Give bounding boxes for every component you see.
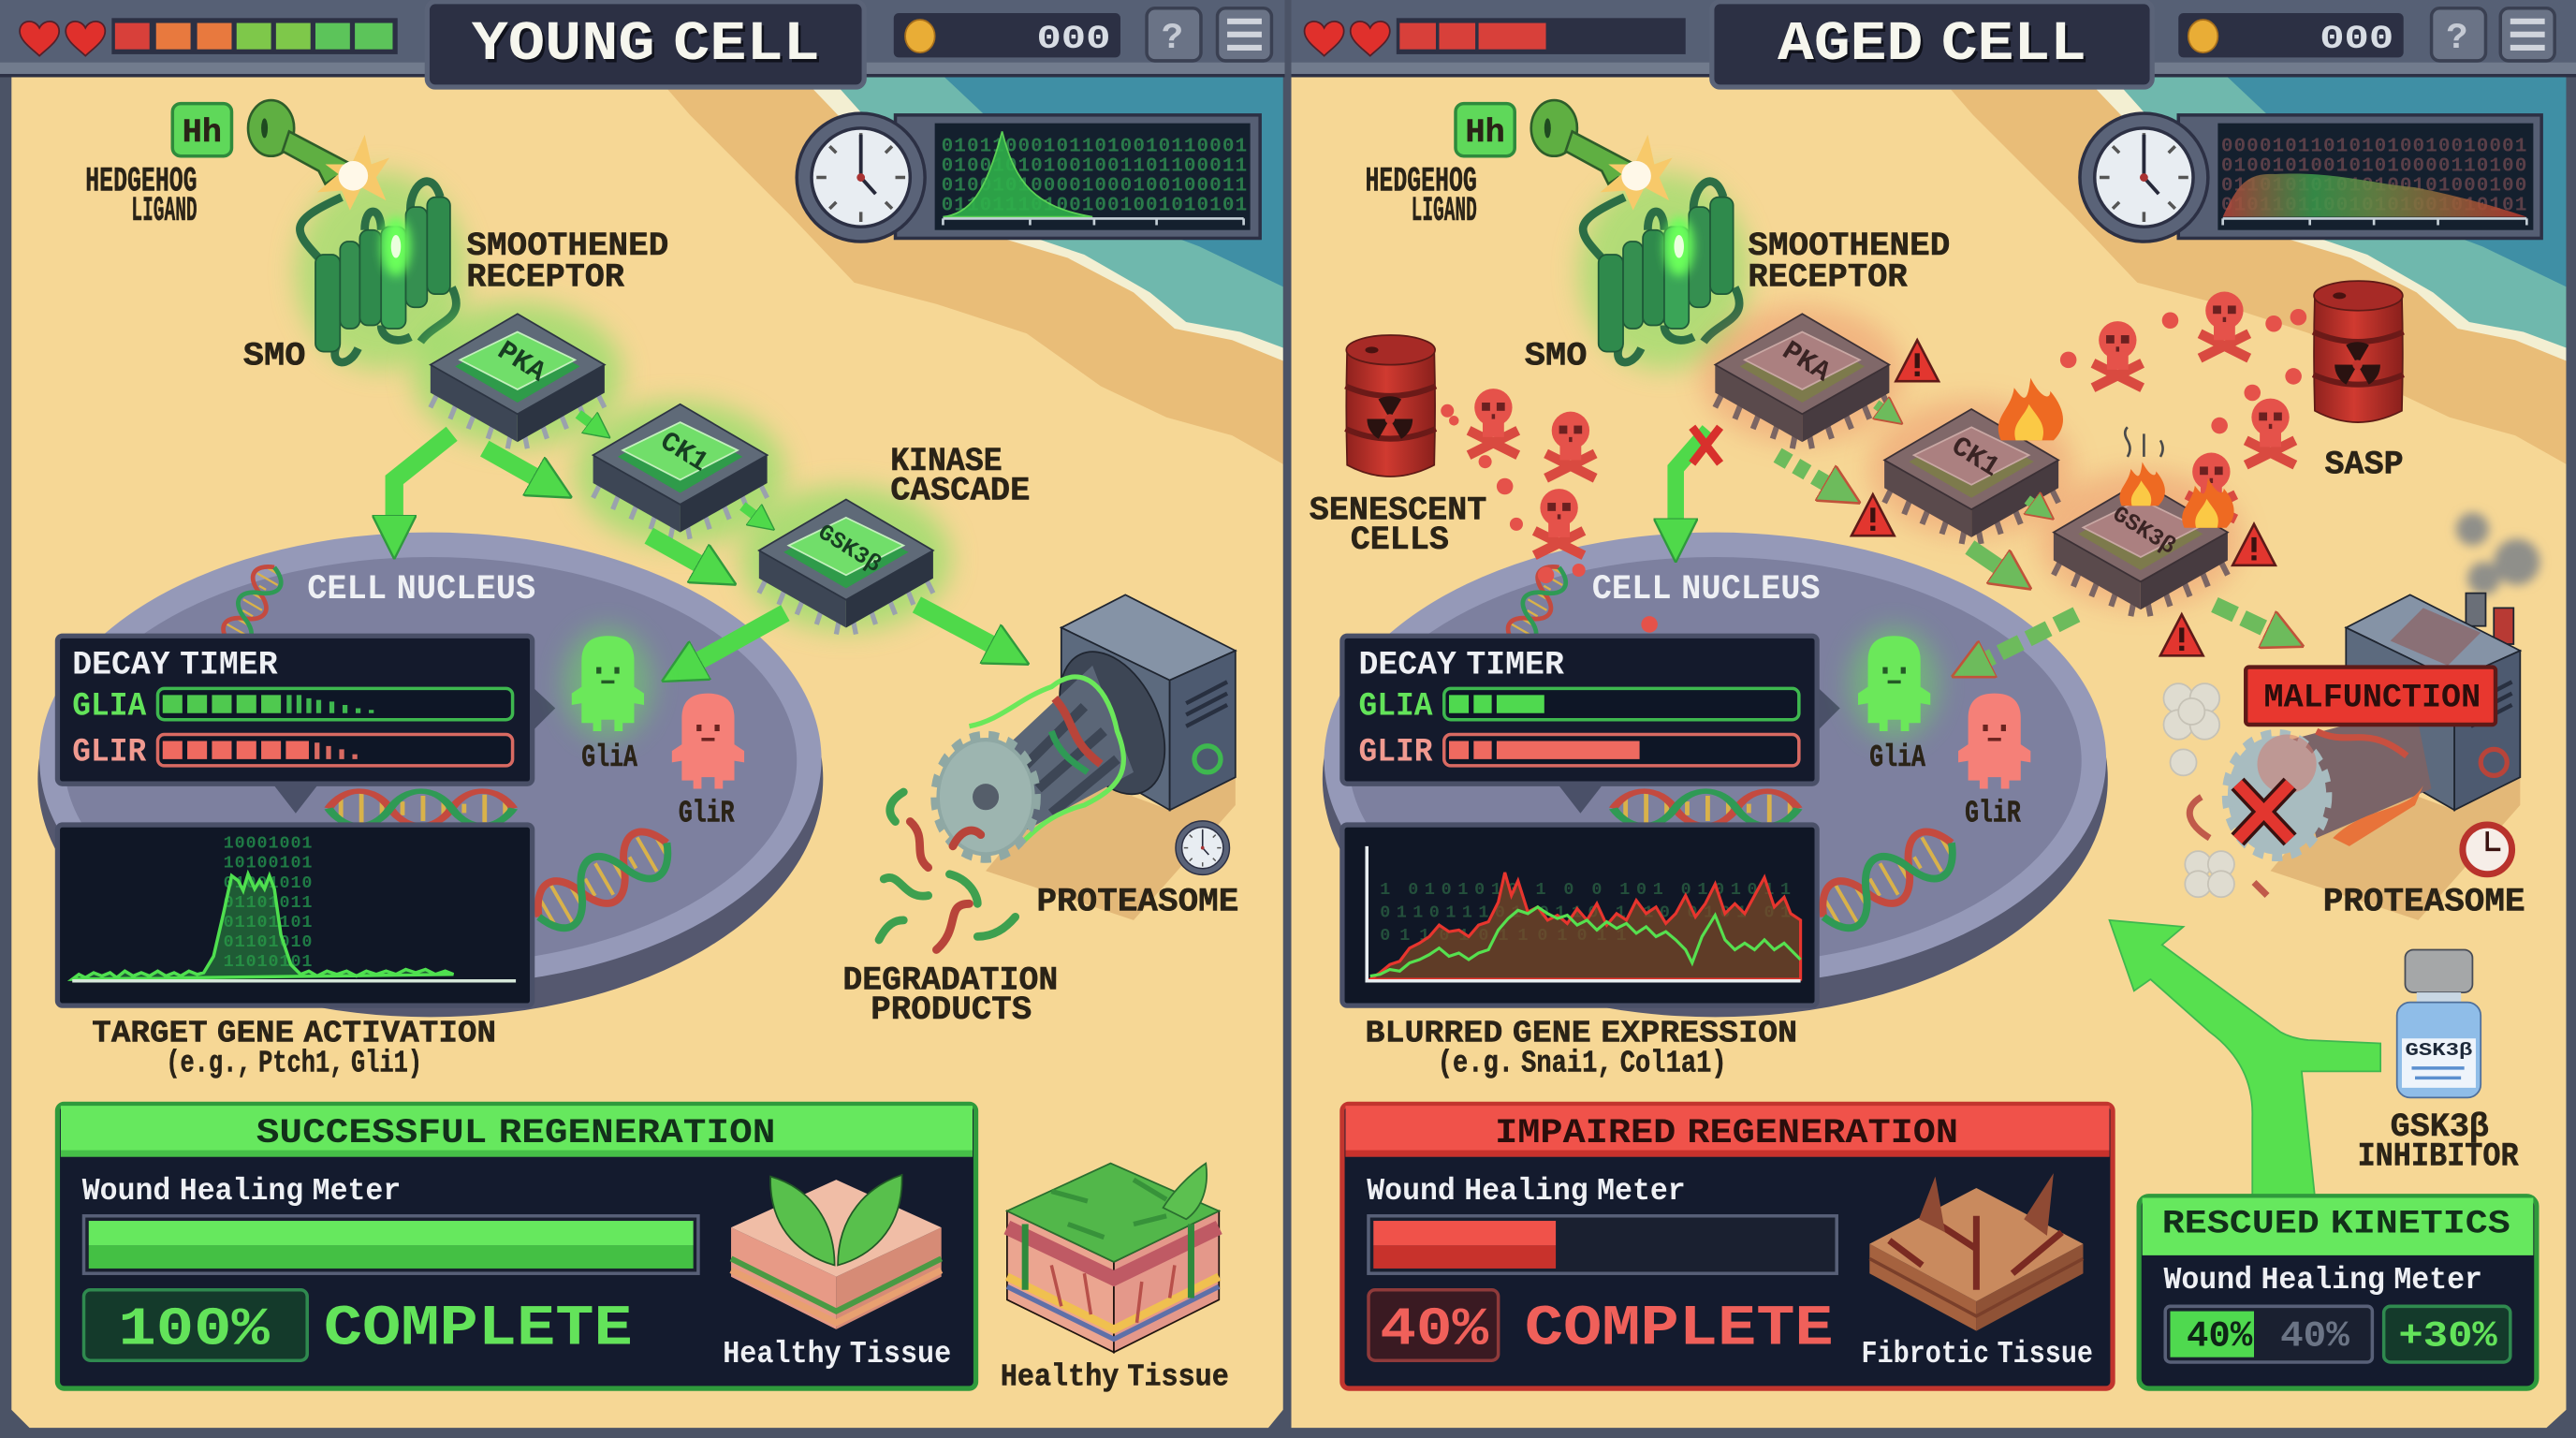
icon: fibrotic tissue: [1869, 1173, 2083, 1331]
nucleus disc: [37, 533, 823, 1017]
title box: AGED CELL: [1780, 16, 2089, 80]
icon: small clock: [1176, 821, 1229, 874]
title box: YOUNG CELL: [474, 16, 822, 80]
label: cell nucleus: CELL NUCLEUS: [1592, 570, 1821, 609]
glia characters: [1850, 627, 2030, 788]
kinase cascade chips: PKA: [491, 335, 551, 389]
label: fibrotic tissue: Fibrotic Tissue: [1862, 1337, 2093, 1372]
panel: blurred gene chart: 011011101 0110 1 10 0101 01: [1380, 902, 1791, 922]
label: glia: GliA: [581, 741, 637, 776]
meter bar: [84, 1216, 698, 1273]
broken proteasome: [2163, 513, 2539, 920]
energy bar: [111, 18, 398, 54]
hearts: [1305, 22, 1390, 56]
panel: clock and flat curve: [2080, 113, 2541, 242]
label: glia: GliA: [1869, 741, 1925, 776]
degradation fragments: [879, 792, 1016, 949]
label: gsk3b inhibitor: [2358, 1108, 2519, 1175]
kinase cascade chips: CK1: [654, 425, 714, 479]
value: 100%: 100%: [118, 1300, 270, 1361]
button: menu: [1218, 8, 1271, 61]
smoothened receptor with key: [172, 100, 466, 370]
panel: decay timer: [57, 636, 555, 814]
score: 000: [1036, 21, 1110, 58]
label: complete: COMPLETE: [324, 1298, 633, 1362]
dna strands: [217, 560, 680, 938]
label: degradation products: [842, 962, 1058, 1029]
label: senescent cells: CELLS: [1351, 521, 1449, 559]
heading: SUCCESSFUL REGENERATION: [256, 1114, 775, 1153]
value: +30%: +30%: [2398, 1315, 2498, 1357]
panel: clock and decay curve: [797, 113, 1260, 242]
panel: rescued kinetics: [2139, 1196, 2537, 1388]
smoothened receptor with key: [1456, 100, 1749, 370]
label: blurred gene expression: (e.g. Snai1, Col1a1): [1438, 1046, 1727, 1081]
panel: target gene chart: [57, 825, 533, 1005]
label: Hh: Hh: [183, 114, 222, 152]
button: help: ?: [1162, 18, 1183, 59]
label: smoothened receptor: SMOOTHENED: [1748, 227, 1950, 265]
proteasome machine: [936, 594, 1236, 920]
score: 000: [2320, 21, 2393, 58]
broken arrows: [1676, 404, 2271, 661]
panel: blurred gene chart: [1342, 825, 1817, 1005]
label: malfunction: [2246, 668, 2496, 725]
label: proteasome: PROTEASOME: [1036, 883, 1238, 920]
bar: glia: GLIA: [72, 687, 147, 725]
panel: impaired regeneration: [1342, 1104, 2113, 1388]
damaged kinase chips: GSK3β: [2107, 503, 2179, 561]
panel: clock and flat curve: 000010110101010010010001: [2221, 135, 2526, 157]
label: hedgehog ligand: HEDGEHOG: [1365, 163, 1477, 202]
energy bar: [1397, 18, 1686, 54]
button: help: [1147, 8, 1201, 61]
bar: glir: GLIR: [1358, 734, 1433, 771]
panel: target gene chart: 01101010: [224, 932, 312, 952]
label: Hh: Hh: [1466, 114, 1505, 152]
panel: clock and flat curve: 011010101010100101000100: [2221, 175, 2526, 198]
damaged kinase chips: CK1: [1946, 431, 2005, 484]
icon: healthy tissue block: [1007, 1164, 1219, 1352]
label: senescent cells: [1310, 492, 1486, 559]
panel: target gene chart: 10001001: [224, 834, 312, 854]
meter: 40% to 40%: 40%: [2187, 1315, 2253, 1357]
label: smoothened receptor: RECEPTOR: [466, 258, 625, 296]
label: kinase cascade: [890, 443, 1030, 510]
panel: blurred gene chart: 1 0101010 1 0 0 101 0101011: [1380, 880, 1791, 900]
meter: 40% to 40%: 40%: [2280, 1315, 2350, 1357]
icons: skulls: [1469, 292, 2295, 555]
damaged kinase chips: [1701, 305, 2243, 616]
bar: glir: GLIR: [72, 734, 147, 771]
icon: red clock: [2463, 825, 2512, 874]
panel: successful regeneration: [57, 1104, 976, 1388]
label: decay timer: DECAY TIMER: [72, 647, 279, 684]
label: healthy tissue: Healthy Tissue: [723, 1337, 951, 1372]
panel: clock and decay curve: 010010100001000100100011: [942, 175, 1247, 198]
panel: target gene chart: 11010101: [224, 952, 312, 972]
panel: clock and decay curve: 010010101001001101100011: [942, 155, 1247, 178]
button: menu: [2500, 8, 2554, 61]
arrow: rescue: [2110, 920, 2380, 1196]
button: help: ?: [2446, 18, 2468, 59]
score: [2178, 13, 2404, 58]
hearts: [20, 22, 105, 56]
label: glir: GliR: [679, 797, 735, 832]
panel: target gene chart: 01101101: [224, 913, 312, 932]
panel: clock and flat curve: 010110110010101001010101: [2221, 195, 2526, 217]
value: 40%: [1368, 1290, 1499, 1361]
label: hedgehog ligand: HEDGEHOG: [85, 163, 198, 202]
label: wound healing meter: Wound Healing Meter: [1367, 1174, 1686, 1210]
bar: glir: [1358, 734, 1799, 771]
red x on arrow: [1692, 427, 1720, 463]
label: proteasome: PROTEASOME: [2323, 883, 2525, 920]
value: +30%: [2384, 1306, 2510, 1362]
icon: inhibitor vial: GSK3β: [2405, 1040, 2473, 1061]
label: gsk3b inhibitor: GSK3β: [2391, 1108, 2489, 1146]
label: kinase cascade: KINASE: [890, 443, 1003, 480]
label: malfunction: MALFUNCTION: [2264, 680, 2481, 717]
label: healthy tissue outside: Healthy Tissue: [1001, 1360, 1229, 1396]
value: 40%: 40%: [1380, 1300, 1488, 1361]
spores: [1441, 309, 2306, 633]
panel: blurred gene chart: 0110101101011: [1380, 926, 1627, 946]
value: 100%: [84, 1290, 307, 1361]
label: senescent cells: SENESCENT: [1310, 492, 1486, 530]
score: [894, 13, 1120, 58]
label: hedgehog ligand: [1365, 163, 1477, 231]
label: decay timer: DECAY TIMER: [1358, 647, 1565, 684]
icon: healthy tissue: [731, 1175, 942, 1329]
smoke puffs: [2163, 683, 2234, 897]
label: wound healing meter: Wound Healing Meter: [2163, 1263, 2482, 1299]
label: degradation products: PRODUCTS: [871, 991, 1032, 1029]
label: SMO: SMO: [1525, 338, 1587, 375]
icons: fire: [1998, 378, 2234, 528]
kinase cascade chips: GSK3β: [812, 521, 885, 579]
kinase cascade chips: [413, 302, 951, 634]
dna strands: [1502, 560, 1964, 938]
label: smoothened receptor: [466, 227, 668, 296]
beach and water: young panel: [657, 77, 1284, 465]
label: complete: COMPLETE: [1525, 1298, 1834, 1362]
beach and water: aged panel: [1940, 77, 2568, 465]
hud: aged cell: [1292, 0, 2576, 87]
label: cell nucleus: CELL NUCLEUS: [307, 570, 535, 609]
panel: aged cell scene: [1310, 100, 2541, 1388]
button: help: [2432, 8, 2485, 61]
icon: red x: [2237, 784, 2291, 840]
nucleus disc: [1323, 533, 2108, 1017]
icon: senescent barrel: [1345, 335, 1436, 477]
label: gsk3b inhibitor: INHIBITOR: [2358, 1137, 2519, 1175]
panel: target gene chart: 01101011: [224, 893, 312, 913]
meter: 40% to 40%: [2165, 1306, 2372, 1362]
bar: glia: GLIA: [1358, 687, 1433, 725]
panel: clock and flat curve: 010010100101010000110100: [2221, 155, 2526, 178]
heading: IMPAIRED REGENERATION: [1495, 1114, 1958, 1153]
label: smoothened receptor: [1748, 227, 1950, 296]
panel: clock and decay curve: 011011101001001001010101: [942, 195, 1247, 217]
panel: target gene chart: 10100101: [224, 854, 312, 873]
icons: warnings: [1852, 340, 2276, 655]
label: blurred gene expression: [1365, 1017, 1797, 1081]
label: target gene activation: TARGET GENE ACTIVATION: [92, 1017, 496, 1052]
title box: [1712, 2, 2152, 87]
label: SMO: SMO: [243, 338, 305, 375]
bar: glia: [72, 687, 513, 725]
bar: glia: [1358, 687, 1799, 725]
meter bar: [1368, 1216, 1837, 1273]
label: hedgehog ligand: LIGAND: [131, 192, 198, 231]
label: hedgehog ligand: LIGAND: [1412, 192, 1477, 231]
damaged kinase chips: PKA: [1777, 335, 1836, 389]
label: wound healing meter: Wound Healing Meter: [82, 1174, 401, 1210]
label: smoothened receptor: RECEPTOR: [1748, 258, 1909, 296]
label: blurred gene expression: BLURRED GENE EXPRESSION: [1365, 1017, 1797, 1052]
icon: inhibitor vial: [2397, 949, 2481, 1097]
arrows: kinase signalling: [394, 414, 994, 662]
label: glir: GliR: [1965, 797, 2021, 832]
label: smoothened receptor: SMOOTHENED: [466, 227, 668, 265]
panel: clock and decay curve: 010110001011010010110001: [942, 135, 1247, 157]
panel: target gene chart: 01001010: [224, 873, 312, 893]
title box: YOUNG CELL: [472, 12, 820, 76]
hud: young cell: [0, 0, 1284, 87]
glia characters: [564, 627, 744, 788]
heading: RESCUED KINETICS: [2162, 1205, 2510, 1242]
label: degradation products: DEGRADATION: [842, 962, 1058, 1000]
panel: young cell scene: [37, 100, 1260, 1396]
panel: decay timer: [1342, 636, 1840, 814]
icon: sasp barrel: [2313, 281, 2404, 422]
title box: AGED CELL: [1778, 12, 2086, 76]
label: target gene activation: [92, 1017, 496, 1081]
bar: glir: [72, 734, 513, 771]
label: sasp: SASP: [2324, 446, 2404, 483]
title box: [427, 2, 864, 87]
label: kinase cascade: CASCADE: [890, 473, 1030, 510]
label: target gene activation: (e.g., Ptch1, Gli1): [166, 1046, 422, 1081]
label: hedgehog ligand: [85, 163, 198, 231]
